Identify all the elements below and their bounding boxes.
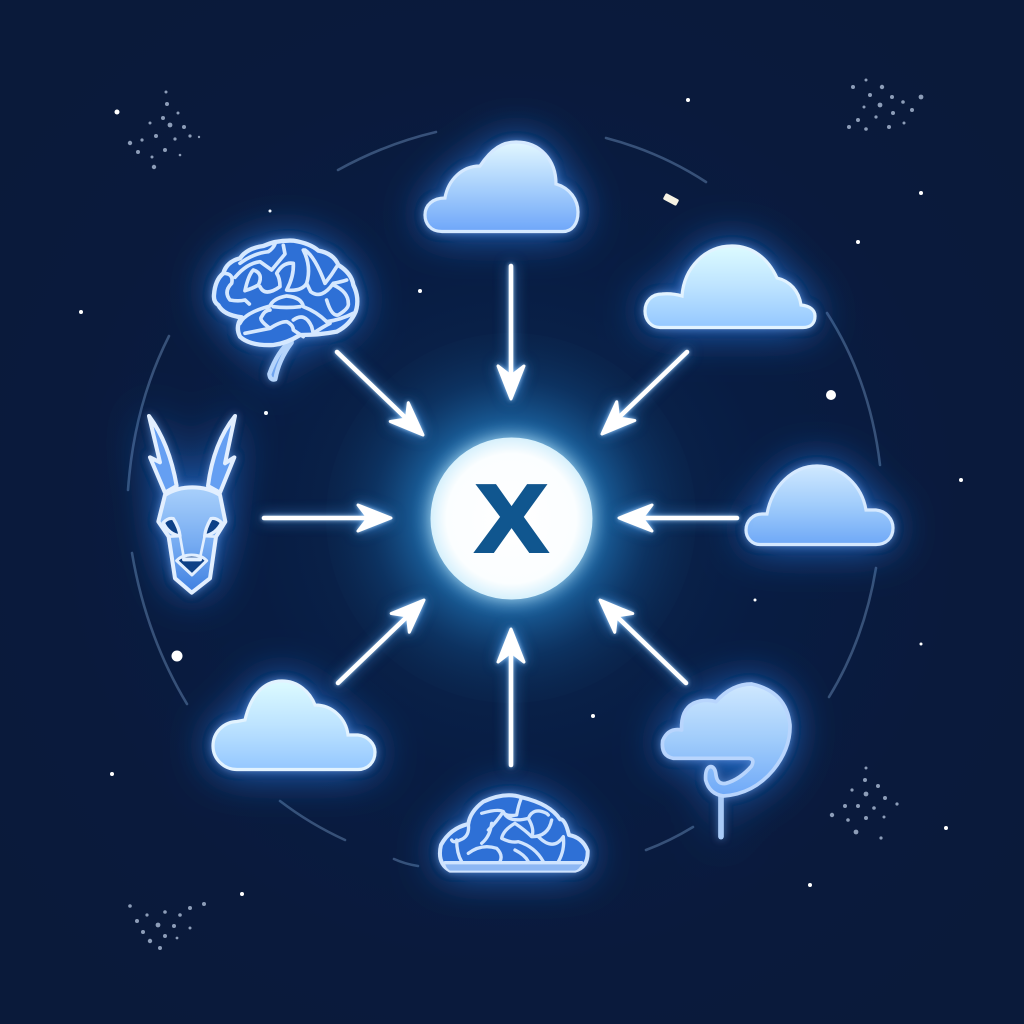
arrow from gazelle [264, 505, 391, 531]
scattered stars [79, 98, 963, 896]
brain outline [214, 241, 357, 345]
arrow from top cloud [498, 266, 524, 399]
star cluster: top left [128, 90, 200, 169]
base band [445, 863, 582, 871]
star cluster: bottom left [128, 902, 206, 950]
cheek lines [169, 536, 216, 555]
star cluster: top right [847, 78, 923, 131]
stem line [712, 795, 729, 837]
icon: top cloud [425, 142, 578, 232]
brain cloud outline [440, 795, 588, 871]
icon: brain [214, 241, 357, 380]
icon: gazelle head [149, 416, 235, 593]
right horn [208, 416, 235, 493]
arrow from right cloud [619, 505, 737, 531]
central node [430, 438, 592, 600]
central label: X [476, 466, 548, 572]
orbit ring segments [128, 132, 880, 866]
star cluster: bottom right [830, 766, 899, 840]
brain cloud folds [445, 797, 582, 863]
brain stem [269, 339, 292, 380]
icon: lower left cloud [213, 681, 375, 770]
icon: cloud stomach hybrid [662, 684, 790, 837]
right eye [205, 518, 222, 536]
arrow from lower left cloud [338, 591, 433, 683]
brain folds [223, 244, 353, 337]
arrow from upper right cloud [593, 352, 687, 443]
icon: brain cloud [440, 795, 588, 871]
cloud stomach body [662, 684, 790, 796]
icon: upper right cloud [645, 246, 815, 328]
central circle [430, 438, 592, 600]
left eye [163, 518, 180, 536]
central halo [326, 333, 696, 703]
arrows pointing to centre [264, 266, 737, 765]
face [158, 487, 225, 593]
nose bridge [184, 553, 200, 565]
arrow from lower right icon [591, 591, 686, 683]
arrow from brain [337, 352, 432, 444]
left horn [149, 416, 177, 493]
icon: right cloud [746, 466, 893, 544]
snout [177, 555, 207, 575]
arrow from bottom icon [498, 629, 524, 765]
